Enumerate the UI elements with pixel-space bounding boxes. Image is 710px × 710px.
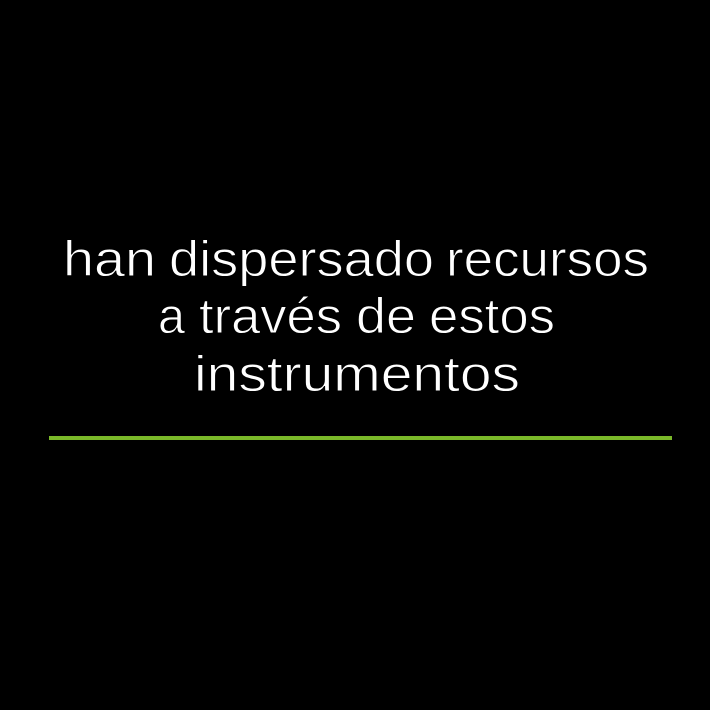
headline line 1: recursos <box>446 231 649 287</box>
headline line 1: dispersado <box>169 231 434 287</box>
headline line 1 <box>63 231 649 287</box>
headline line 2: estos <box>429 288 555 344</box>
green underline <box>49 436 672 440</box>
headline line 2: a <box>158 288 185 344</box>
headline line 1: han <box>63 231 156 287</box>
headline line 2: de <box>356 288 416 344</box>
headline line 3: instrumentos <box>194 346 520 402</box>
headline line 2: través <box>199 288 342 344</box>
headline line 2 <box>158 288 555 344</box>
